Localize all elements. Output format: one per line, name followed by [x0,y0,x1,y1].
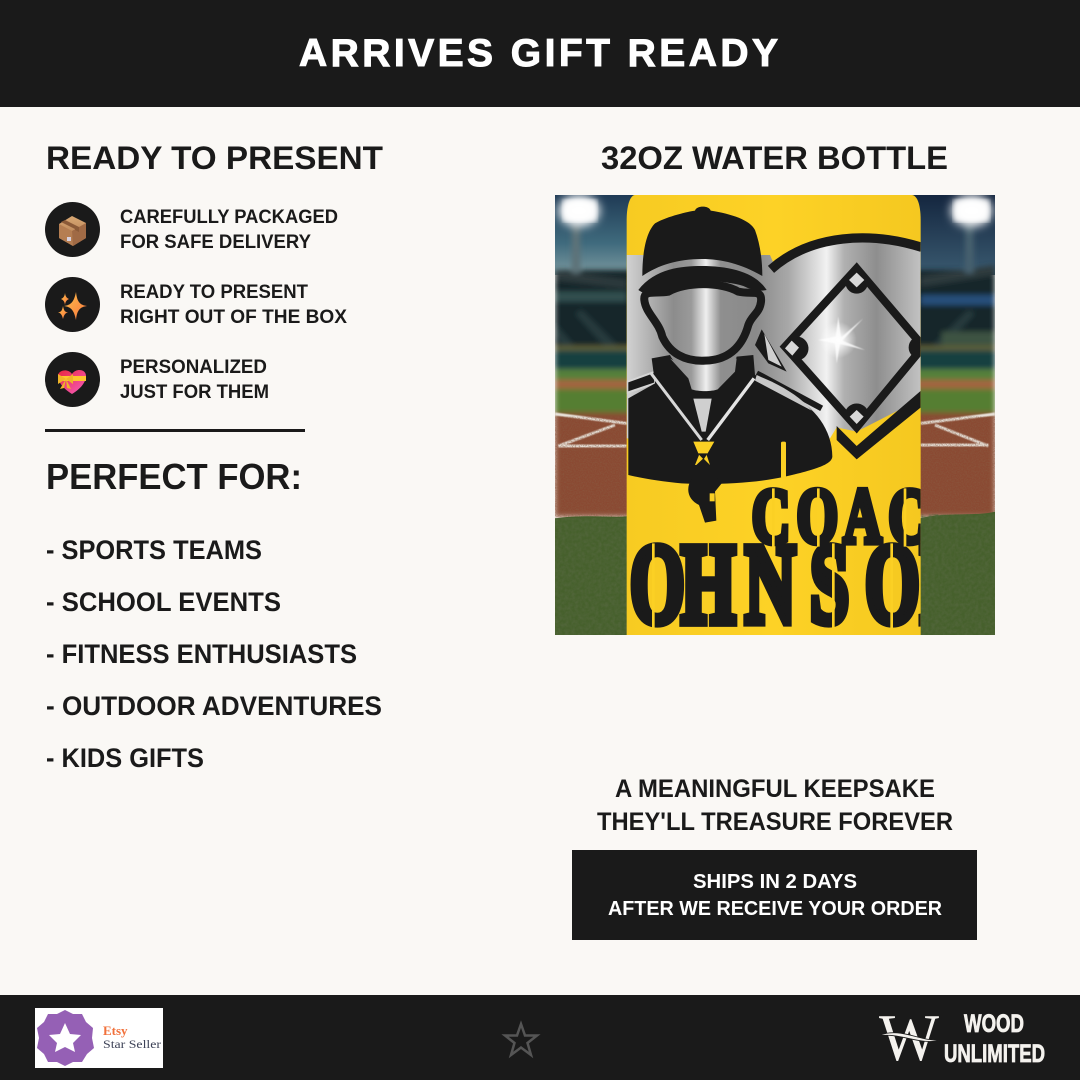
badge: etsy star seller [35,1008,163,1068]
field arc [771,238,922,269]
audience list: - SPORTS TEAMS [46,535,262,565]
heading: ready to present: READY TO PRESENT [46,140,383,176]
panel: keepsake message: A MEANINGFUL KEEPSAKE [615,775,935,803]
badge: etsy star seller: Star Seller [103,1037,161,1051]
face outline [644,284,761,361]
feature: ready right out of the box: RIGHT OUT OF THE BOX [120,307,347,328]
feature: carefully packaged: CAREFULLY PACKAGED [120,207,338,228]
panel: keepsake message [597,775,953,836]
callout: shipping: SHIPS IN 2 DAYS [693,871,857,893]
icon: gift heart [58,370,86,394]
audience list: - KIDS GIFTS [46,743,204,773]
logo: wood unlimited [878,1001,1045,1075]
logo: wood unlimited: WOOD [964,1010,1024,1038]
badge: etsy star seller: Etsy [103,1023,128,1038]
heading: product name: 32OZ WATER BOTTLE [601,140,948,176]
feature: personalized [45,352,269,407]
bottle [626,195,921,635]
panel: ready to present [45,140,383,407]
feature: carefully packaged [45,202,338,257]
personalized name [630,486,921,628]
icon: sparkles [58,292,87,320]
cap brim [638,266,767,294]
cap [642,207,762,276]
stadium background [555,195,995,635]
audience list: - OUTDOOR ADVENTURES [46,691,382,721]
feature: personalized: PERSONALIZED [120,357,267,378]
title: ARRIVES GIFT READY [299,32,778,75]
baseball diamond [784,268,923,459]
icon: star [505,1024,537,1055]
coach figure [627,207,832,523]
icon: package box [59,216,86,246]
panel: keepsake message: THEY'LL TREASURE FOREVER [597,808,953,836]
panel: perfect for [46,456,382,773]
steel engraving [627,239,922,438]
audience list [46,535,382,773]
personalized name: COACH [752,473,973,560]
sparkle [820,318,864,362]
logo: wood unlimited: UNLIMITED [944,1040,1045,1068]
feature: personalized: JUST FOR THEM [120,382,269,403]
audience list: - FITNESS ENTHUSIASTS [46,639,357,669]
product photo: personalized water bottle [555,195,995,647]
callout: shipping: AFTER WE RECEIVE YOUR ORDER [608,898,943,920]
feature: ready right out of the box [45,277,347,332]
footer band [0,995,1080,1080]
audience list: - SCHOOL EVENTS [46,587,281,617]
callout: shipping [572,850,977,940]
feature: ready right out of the box: READY TO PRESENT [120,282,308,303]
personalized name: JOHNSON [575,522,971,647]
header band [0,0,1080,107]
feature: carefully packaged: FOR SAFE DELIVERY [120,232,311,253]
heading: perfect for: PERFECT FOR: [46,456,302,497]
whistle [688,442,722,523]
logo: wood unlimited: W [879,1001,940,1075]
